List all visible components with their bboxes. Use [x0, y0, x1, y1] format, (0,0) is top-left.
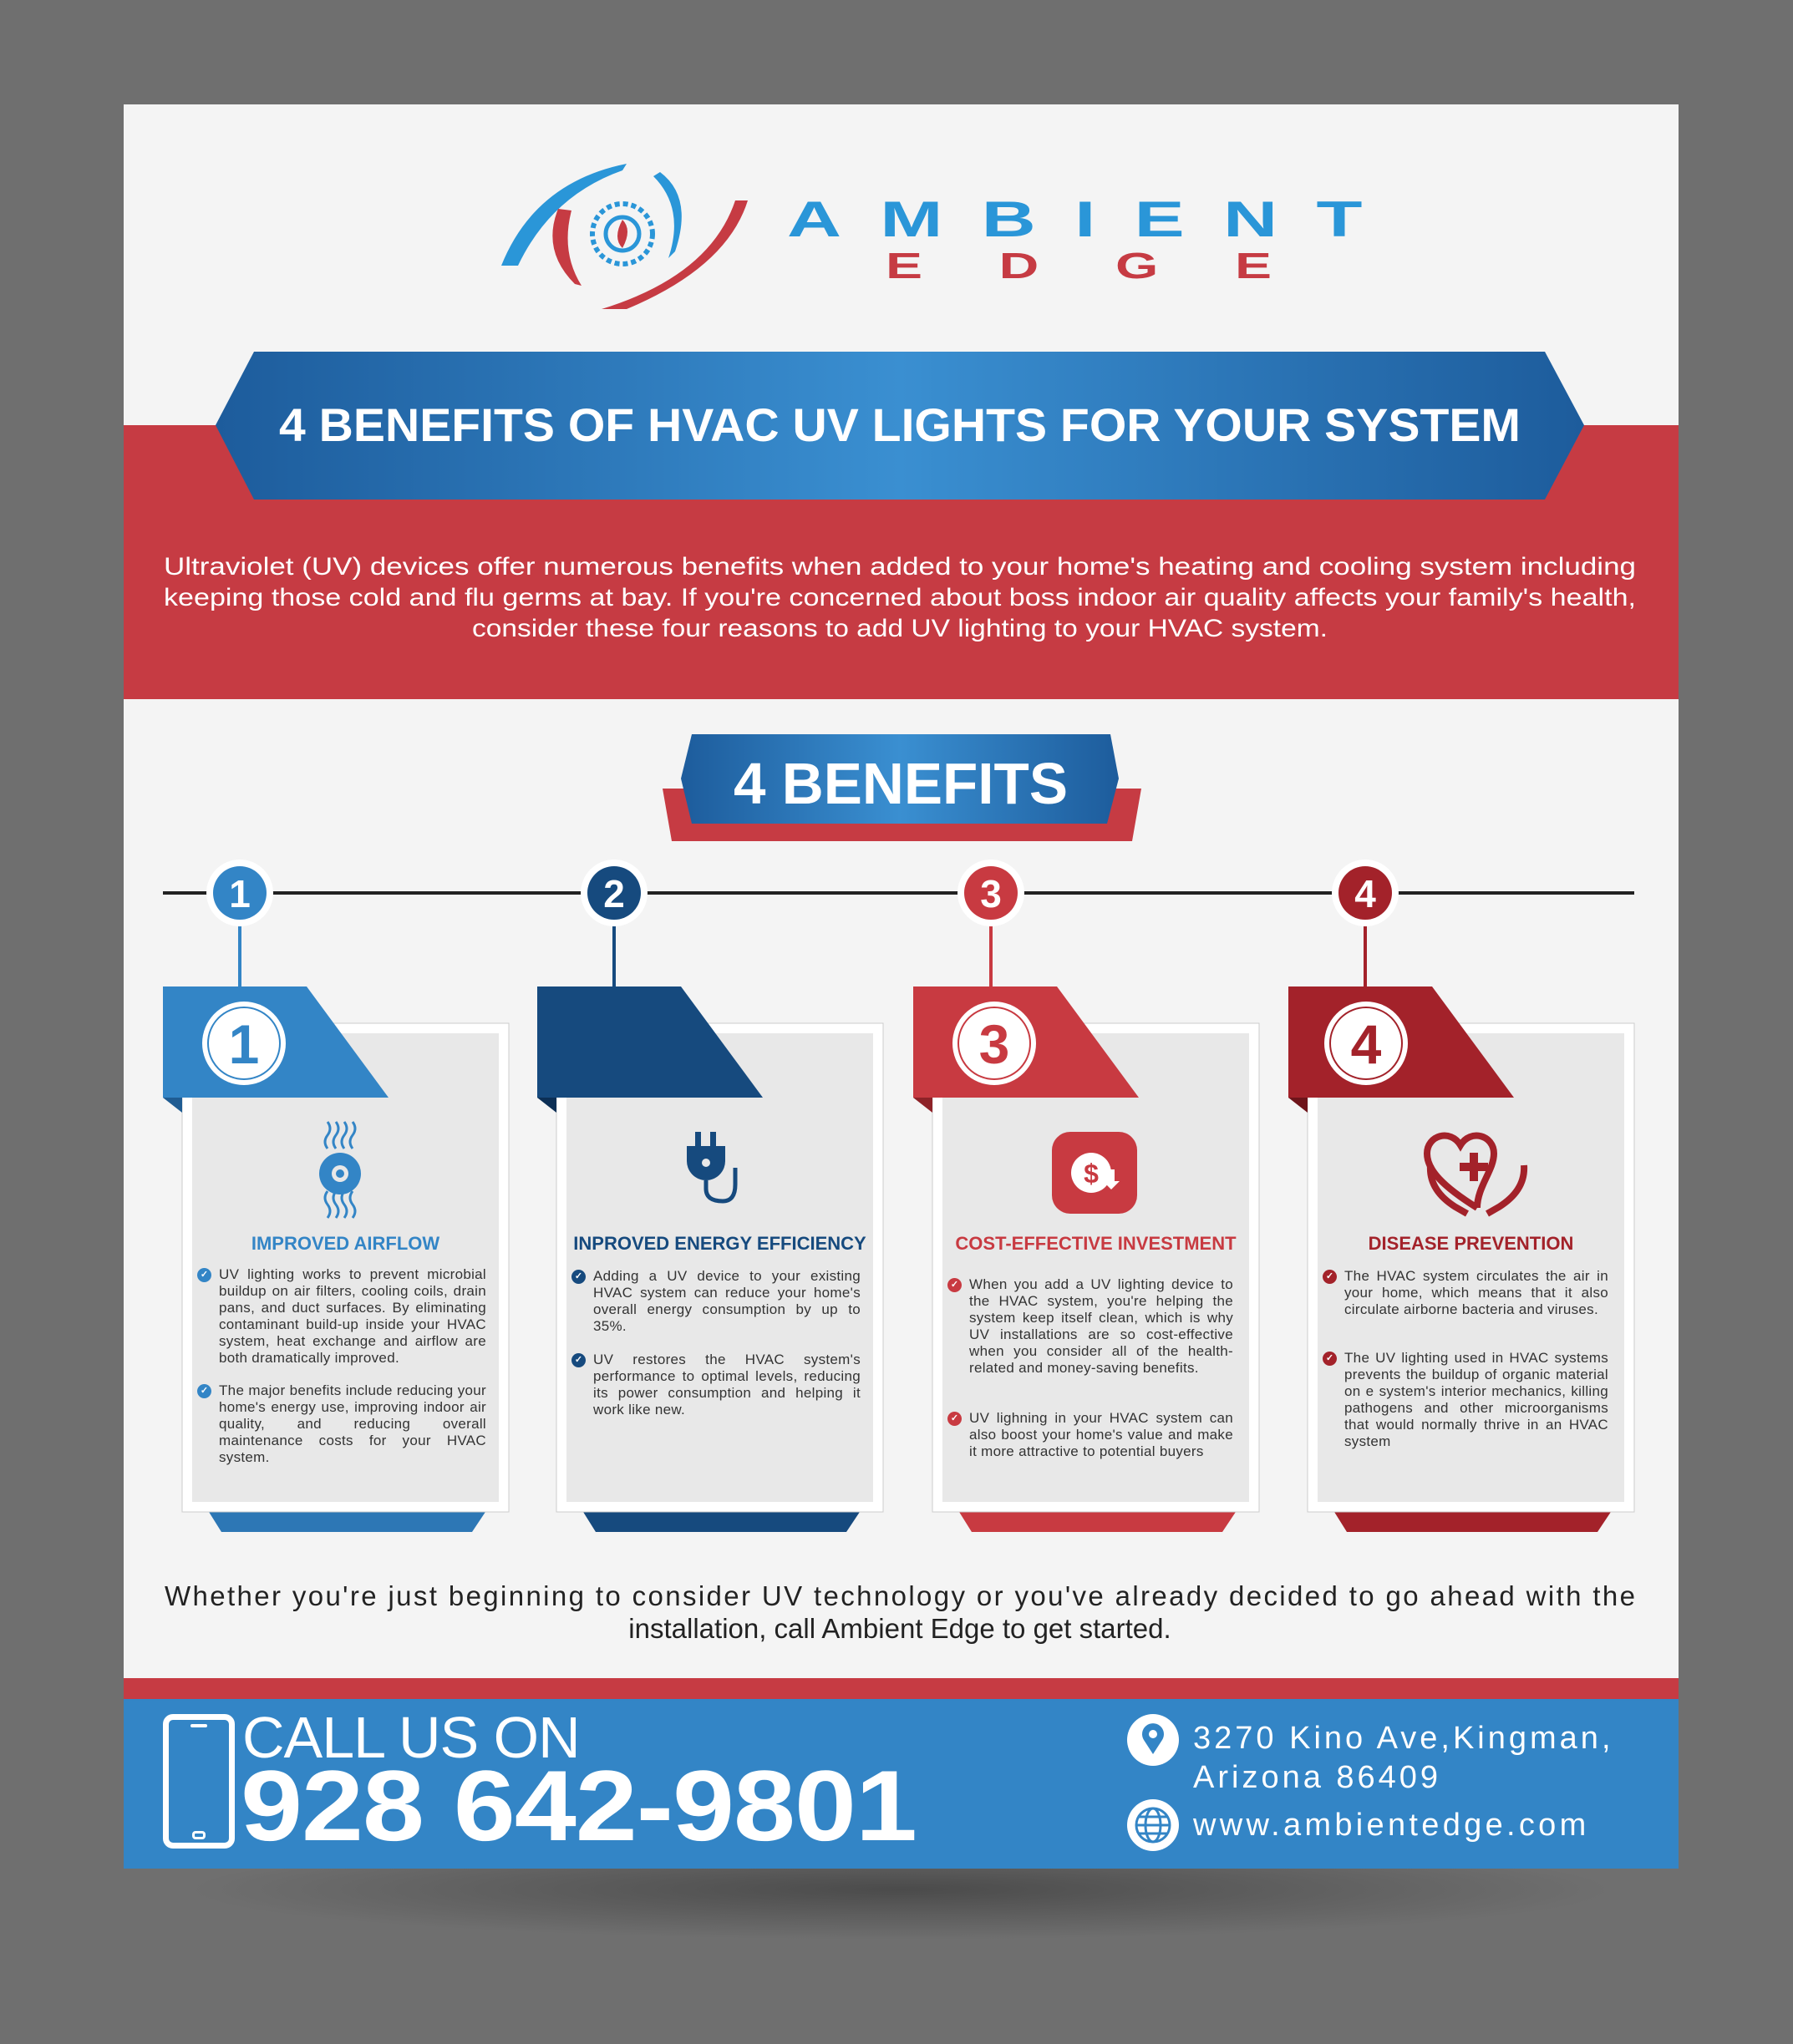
title banner [216, 352, 1584, 500]
title banner: 4 BENEFITS OF HVAC UV LIGHTS FOR YOUR SYSTEM [279, 398, 1521, 451]
closing text [165, 1580, 1635, 1644]
card 1 text: The major benefits include reducing your home's energy use, improving indoor air quality, and reducing overall maintenance costs for your HVAC system. [219, 1382, 486, 1465]
logo: AMBIENT [787, 192, 1362, 247]
icon: plug [687, 1132, 735, 1201]
card 1 text [197, 1266, 486, 1465]
card 2 text: Adding a UV device to your existing HVAC system can reduce your home's overall energy consumption by up to 35%. [593, 1268, 861, 1334]
card 1 frame [163, 986, 509, 1532]
card 4 text [1323, 1268, 1608, 1449]
card 2 text: ✓ [575, 1271, 582, 1281]
red band [124, 425, 1679, 699]
card 4 heading: DISEASE PREVENTION [1369, 1233, 1573, 1254]
logo [501, 164, 1362, 309]
address: 3270 Kino Ave,Kingman, [1193, 1721, 1614, 1756]
card 3 heading: COST-EFFECTIVE INVESTMENT [955, 1233, 1237, 1254]
card 3 text [947, 1276, 1233, 1459]
card 2 text: UV restores the HVAC system's performance to optimal levels, reducing its power consumption and helping it work like new. [593, 1352, 861, 1418]
logo: EDGE [886, 245, 1272, 286]
card 4 text: ✓ [1326, 1271, 1333, 1281]
white sheet [124, 104, 1679, 1869]
card 3 text: When you add a UV lighting device to the HVAC system, you're helping the system keep itself clean, which is why UV installations are so cost-effective when you consider all of the health-related and money-saving benefits. [969, 1276, 1233, 1376]
website: www.ambientedge.com [1193, 1808, 1590, 1843]
card 2 frame [537, 986, 883, 1532]
address: Arizona 86409 [1193, 1760, 1441, 1795]
card 1 text: ✓ [201, 1386, 208, 1396]
call us on: CALL US ON [242, 1705, 580, 1770]
card 2 heading: INPROVED ENERGY EFFICIENCY [573, 1233, 866, 1254]
card 1 heading: IMPROVED AIRFLOW [251, 1233, 439, 1254]
card 2 text [571, 1268, 861, 1418]
4 benefits heading: 4 BENEFITS [734, 751, 1068, 816]
icon: location pin [1127, 1714, 1179, 1766]
card 4 text: The HVAC system circulates the air in your home, which means that it also circulate airborne bacteria and viruses. [1344, 1268, 1608, 1317]
closing text: installation, call Ambient Edge to get started. [628, 1613, 1171, 1644]
card 3 text: UV lighning in your HVAC system can also boost your home's value and make it more attractive to potential buyers [969, 1410, 1233, 1459]
timeline: 1 [229, 872, 251, 915]
card 4 frame [1288, 986, 1634, 1532]
timeline: 4 [1354, 872, 1376, 915]
timeline: 3 [980, 872, 1002, 915]
icon: money: $ [1084, 1159, 1099, 1189]
card 3 frame: 3 [979, 1013, 1009, 1075]
timeline [163, 860, 1634, 986]
card 1 text: UV lighting works to prevent microbial buildup on air filters, cooling coils, drain pans, and duct surfaces. By eliminating contaminant build-up inside your HVAC system, heat exchange and airflow are both dramatically improved. [219, 1266, 486, 1366]
icon: globe [1127, 1799, 1179, 1851]
address [1193, 1721, 1614, 1795]
card 4 text: ✓ [1326, 1353, 1333, 1363]
card 4 text: The UV lighting used in HVAC systems prevents the buildup of organic material on e system's interior mechanics, killing pathogens and other microorganisms that would normally thrive in an HVAC system [1344, 1350, 1608, 1449]
icon: hands heart [1427, 1136, 1524, 1214]
intro text: keeping those cold and flu germs at bay. If you're concerned about boss indoor air quality affects your family's health, [164, 584, 1636, 611]
icon: fan [319, 1122, 361, 1218]
intro text: consider these four reasons to add UV lighting to your HVAC system. [472, 615, 1328, 642]
footer [124, 1678, 1679, 1699]
card 1 frame: 1 [229, 1013, 259, 1075]
card 2 text: ✓ [575, 1355, 582, 1365]
icon: phone [163, 1714, 235, 1849]
card 4 frame: 4 [1351, 1013, 1382, 1075]
card 3 text: ✓ [951, 1280, 958, 1290]
intro text: Ultraviolet (UV) devices offer numerous benefits when added to your home's heating and cooling system including [164, 553, 1636, 581]
card 3 frame [913, 986, 1259, 1532]
card 3 text: ✓ [951, 1413, 958, 1423]
card 1 text: ✓ [201, 1270, 208, 1280]
icon: money [1052, 1132, 1137, 1214]
intro text [164, 553, 1636, 642]
4 benefits heading [663, 734, 1141, 841]
timeline: 2 [603, 872, 625, 915]
closing text: Whether you're just beginning to consider UV technology or you've already decided to go ahead with the [165, 1580, 1635, 1611]
phone number: 928 642-9801 [241, 1750, 917, 1862]
